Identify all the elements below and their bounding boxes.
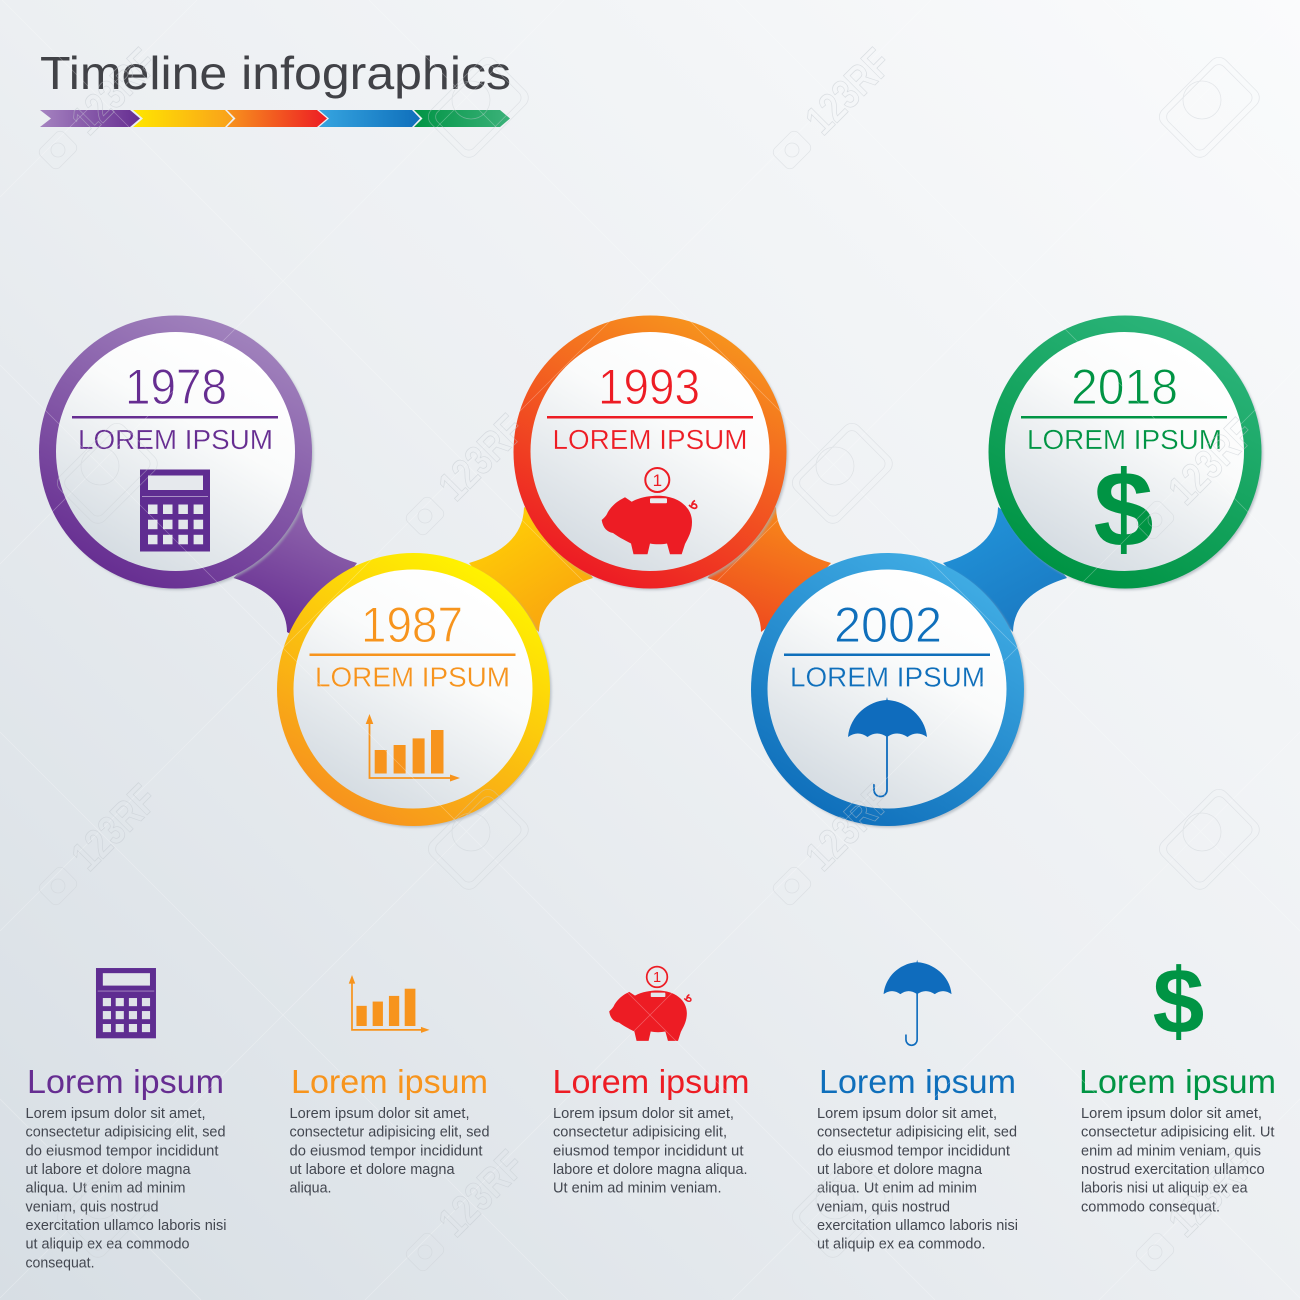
body text: consectetur adipisicing elit, sed bbox=[26, 1125, 226, 1141]
divider bbox=[784, 654, 990, 656]
watermarks: 123RF bbox=[1159, 409, 1263, 513]
icon: bar chart bbox=[349, 975, 430, 1033]
panel: 2002 bbox=[751, 553, 1026, 828]
body text: exercitation ullamco laboris nisi bbox=[817, 1218, 1018, 1234]
divider bbox=[310, 654, 516, 656]
label: LOREM IPSUM bbox=[1027, 424, 1222, 455]
body text: ut labore et dolore magna bbox=[26, 1162, 191, 1178]
column: orange bbox=[290, 975, 490, 1197]
body text: veniam, quis nostrud bbox=[26, 1199, 158, 1215]
body text: nostrud exercitation ullamco bbox=[1081, 1162, 1265, 1178]
arrow: orange bbox=[227, 110, 327, 127]
arrow: purple bbox=[40, 110, 140, 127]
body text: enim ad minim veniam, quis bbox=[1081, 1143, 1261, 1159]
body text bbox=[290, 1106, 490, 1197]
body text: Lorem ipsum dolor sit amet, bbox=[817, 1106, 997, 1122]
body text: consectetur adipisicing elit, sed bbox=[290, 1125, 490, 1141]
icon: piggy bank: 1 bbox=[653, 970, 661, 986]
icon: calculator bbox=[96, 968, 156, 1038]
panel: 1978 bbox=[39, 316, 314, 590]
body text: ut aliquip ex ea commodo bbox=[26, 1237, 190, 1253]
icon: piggy bank: 1 bbox=[653, 471, 662, 490]
body text: consectetur adipisicing elit, bbox=[553, 1125, 727, 1141]
icon: calculator bbox=[140, 470, 210, 552]
watermarks: 123RF bbox=[796, 775, 900, 879]
watermarks: 123RF bbox=[62, 775, 166, 879]
watermarks: 123RF bbox=[62, 39, 166, 143]
panel: 2018 bbox=[988, 316, 1263, 590]
heading: Lorem ipsum bbox=[552, 1063, 750, 1100]
panel: 1987 bbox=[277, 553, 552, 828]
body text: commodo consequat. bbox=[1081, 1199, 1220, 1215]
heading: Lorem ipsum bbox=[1079, 1063, 1276, 1100]
label: LOREM IPSUM bbox=[790, 662, 985, 692]
year: 2002 bbox=[834, 597, 942, 653]
column: red bbox=[552, 967, 750, 1197]
arrow: blue bbox=[319, 110, 420, 127]
title: Timeline infographics bbox=[40, 47, 511, 99]
icon: umbrella bbox=[884, 960, 952, 1045]
body text: ut labore et dolore magna bbox=[290, 1162, 455, 1178]
icon: piggy bank bbox=[609, 967, 691, 1041]
year: 2018 bbox=[1071, 359, 1178, 415]
icon: bar chart bbox=[366, 714, 460, 782]
body text: do eiusmod tempor incididunt bbox=[290, 1143, 482, 1159]
connector: purple to yellow bbox=[234, 507, 357, 640]
body text: veniam, quis nostrud bbox=[817, 1199, 950, 1215]
body text: do eiusmod tempor incididunt bbox=[26, 1143, 218, 1159]
body text: Lorem ipsum dolor sit amet, bbox=[1081, 1106, 1262, 1122]
body text bbox=[817, 1106, 1018, 1253]
body text: ut labore et dolore magna bbox=[817, 1162, 983, 1178]
body text: aliqua. Ut enim ad minim bbox=[26, 1181, 186, 1197]
watermarks: 123RF bbox=[429, 1141, 533, 1245]
body text bbox=[26, 1106, 226, 1271]
label: LOREM IPSUM bbox=[78, 424, 273, 455]
watermarks: 123RF bbox=[1159, 1141, 1263, 1245]
body text: labore et dolore magna aliqua. bbox=[553, 1162, 748, 1178]
divider bbox=[547, 416, 753, 418]
body text: Ut enim ad minim veniam. bbox=[553, 1181, 722, 1197]
body text bbox=[1081, 1106, 1274, 1215]
body text: exercitation ullamco laboris nisi bbox=[26, 1218, 226, 1234]
panel: 1993 bbox=[514, 316, 788, 590]
watermarks: 123RF bbox=[429, 405, 533, 509]
body text: consequat. bbox=[26, 1255, 94, 1271]
body text: laboris nisi ut aliquip ex ea bbox=[1081, 1181, 1248, 1197]
heading: Lorem ipsum bbox=[291, 1063, 488, 1100]
body text: consectetur adipisicing elit. Ut bbox=[1081, 1125, 1274, 1141]
body text: Lorem ipsum dolor sit amet, bbox=[290, 1106, 470, 1122]
body text: eiusmod tempor incididunt ut bbox=[553, 1143, 744, 1159]
body text: consectetur adipisicing elit, sed bbox=[817, 1125, 1017, 1141]
year: 1993 bbox=[598, 359, 700, 415]
icon: dollar: $ bbox=[1153, 949, 1204, 1053]
arrow: yellow bbox=[133, 110, 233, 127]
column: purple bbox=[26, 968, 226, 1271]
arrow: green bbox=[414, 110, 510, 127]
body text: Lorem ipsum dolor sit amet, bbox=[553, 1106, 734, 1122]
body text: aliqua. bbox=[290, 1181, 332, 1197]
label: LOREM IPSUM bbox=[552, 424, 748, 455]
body text: do eiusmod tempor incididunt bbox=[817, 1143, 1010, 1159]
body text bbox=[553, 1106, 748, 1197]
connector: blue to green bbox=[943, 507, 1067, 632]
icon: dollar: $ bbox=[1093, 448, 1154, 569]
column: blue bbox=[817, 960, 1018, 1253]
heading: Lorem ipsum bbox=[27, 1063, 224, 1100]
icon: umbrella bbox=[848, 697, 927, 797]
body text: ut aliquip ex ea commodo. bbox=[817, 1237, 986, 1253]
year: 1978 bbox=[125, 359, 227, 415]
heading: Lorem ipsum bbox=[819, 1063, 1016, 1100]
watermarks: 123RF bbox=[796, 39, 900, 143]
column: green bbox=[1079, 949, 1276, 1215]
connector: red to blue bbox=[708, 507, 831, 632]
label: LOREM IPSUM bbox=[315, 662, 510, 692]
divider bbox=[72, 416, 278, 418]
body text: Lorem ipsum dolor sit amet, bbox=[26, 1106, 206, 1122]
icon: piggy bank bbox=[602, 468, 697, 554]
year: 1987 bbox=[361, 597, 463, 653]
arrow bar bbox=[40, 110, 510, 127]
divider bbox=[1021, 416, 1227, 418]
body text: aliqua. Ut enim ad minim bbox=[817, 1181, 977, 1197]
connector: yellow to red bbox=[469, 507, 593, 632]
